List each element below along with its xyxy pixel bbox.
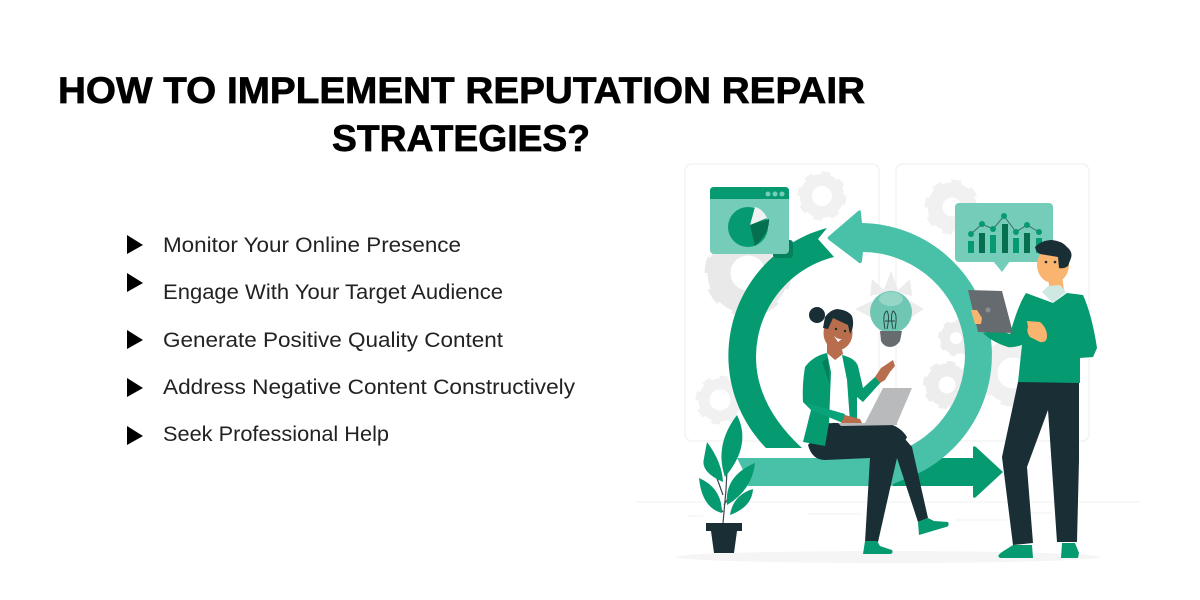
list item: engage [127, 273, 503, 304]
illustration: team working on reputation cycle [635, 164, 1140, 563]
front leg [808, 423, 907, 542]
ground line [635, 502, 1140, 520]
list item: monitor: Monitor Your Online Presence [163, 234, 461, 257]
list item: generate: Generate Positive Quality Content [163, 329, 503, 352]
head [1035, 240, 1072, 283]
background panel left [685, 164, 879, 441]
list item: address: Address Negative Content Constructively [163, 376, 576, 399]
shoes [918, 518, 949, 535]
list item: engage: Engage With Your Target Audience [163, 281, 503, 304]
line and bar chart bubble [955, 203, 1053, 272]
woman sitting with laptop [803, 307, 949, 554]
sweater [983, 293, 1097, 383]
head [809, 307, 853, 350]
cycle arrow teal [828, 210, 992, 484]
ground shadow [676, 551, 1100, 563]
laptop [838, 388, 912, 426]
chart window icon [710, 187, 793, 258]
light bulb [855, 271, 924, 347]
neck [1048, 276, 1064, 294]
collar [1042, 285, 1066, 303]
gears [698, 174, 1044, 422]
pants [1002, 382, 1079, 545]
hands [971, 310, 982, 324]
plant [699, 415, 755, 553]
jacket [803, 353, 831, 446]
background panel right [896, 164, 1089, 441]
bottom arrow [737, 446, 1003, 498]
shoes [998, 545, 1033, 558]
back leg [872, 430, 928, 540]
cycle arrow green [728, 228, 834, 448]
title: HOW TO IMPLEMENT REPUTATION REPAIR [58, 69, 865, 111]
man with tablet [968, 240, 1097, 558]
tablet [968, 290, 1013, 333]
title: STRATEGIES? [332, 117, 590, 159]
shirt [827, 352, 855, 423]
hands and neck [875, 360, 895, 383]
title [58, 69, 865, 159]
list item: seek help: Seek Professional Help [163, 423, 389, 446]
bullet list [127, 234, 576, 446]
